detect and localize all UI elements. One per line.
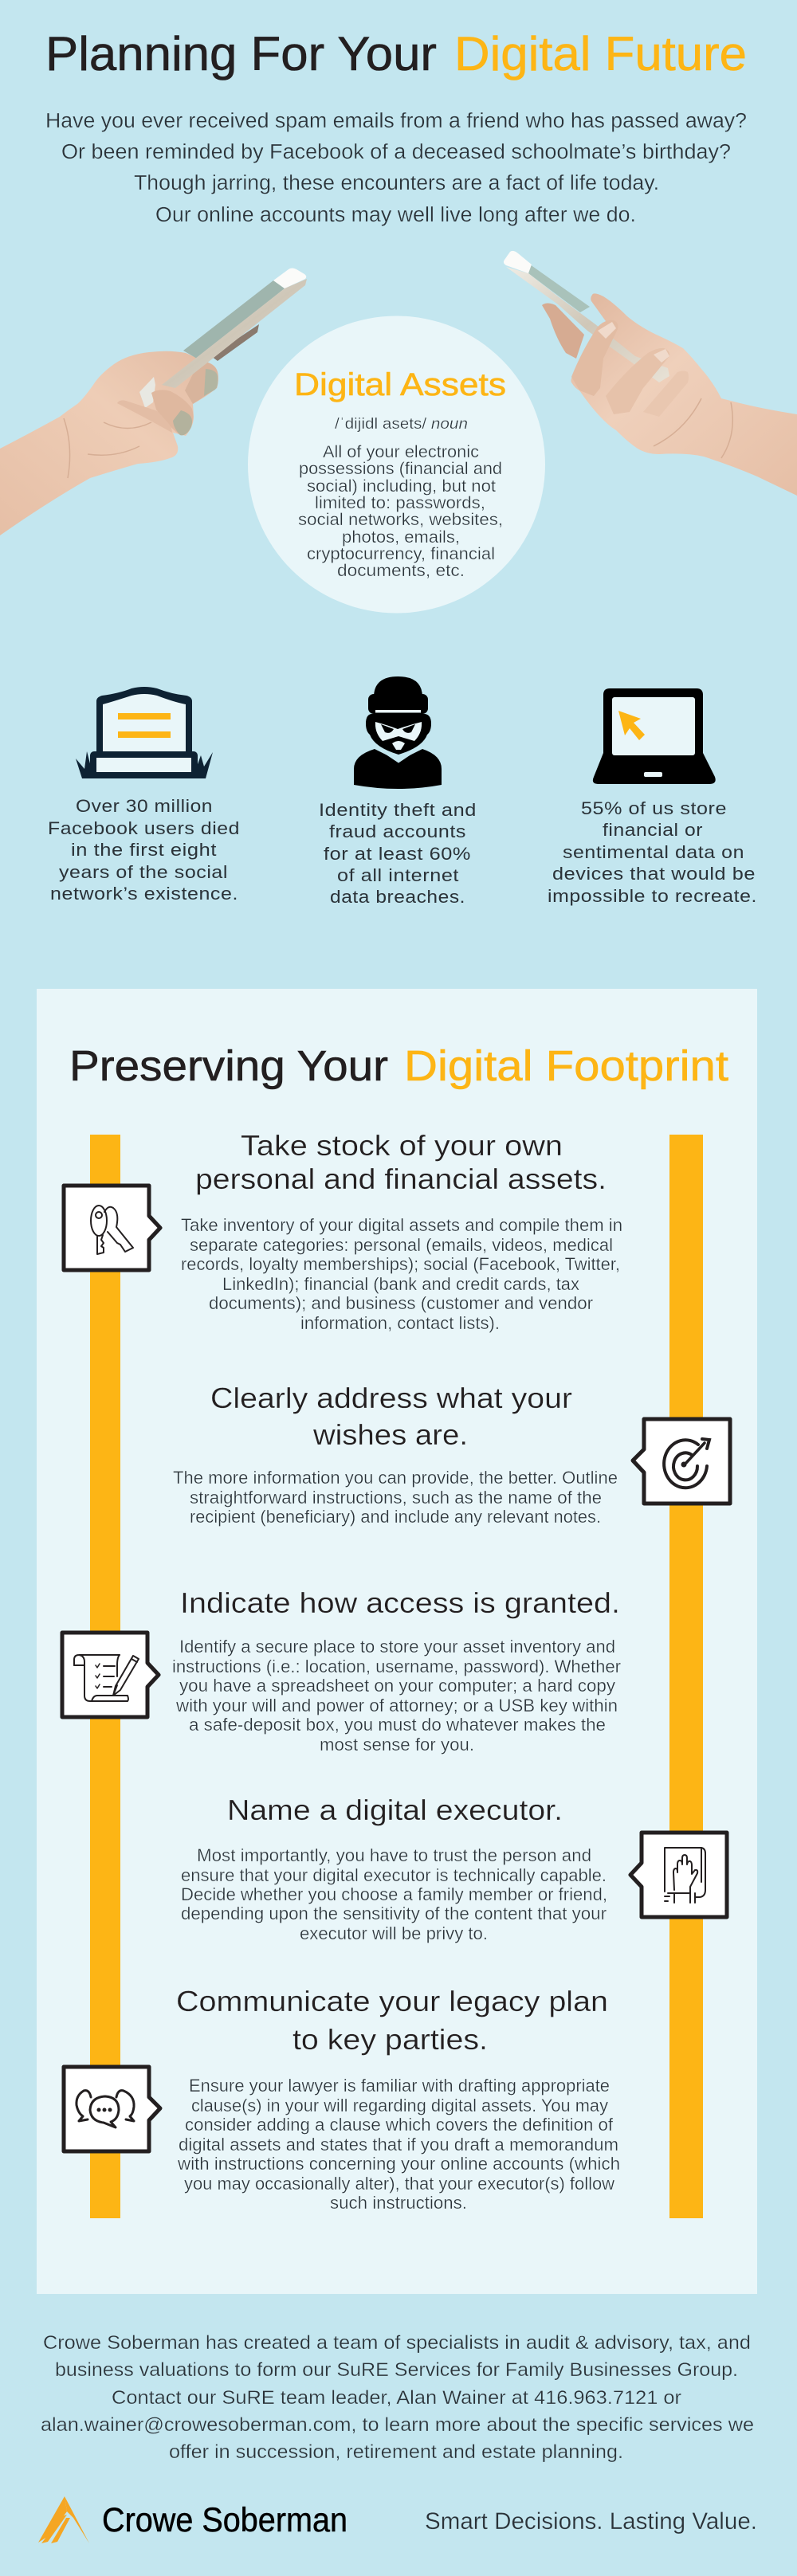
closing text: Crowe Soberman has created a team of specialists in audit & advisory, tax, and <box>43 2332 751 2354</box>
step heading <box>195 1129 607 1195</box>
step text: instructions (i.e.: location, username, password). Whether <box>172 1657 621 1676</box>
illustration: right hand holding phone <box>504 251 797 496</box>
heading: preserving your digital footprint: Preserving Your <box>69 1042 388 1090</box>
icon: laptop with cursor <box>593 688 716 784</box>
stat text: identity theft: for at least 60% <box>324 844 471 864</box>
intro text <box>45 110 747 226</box>
title: Planning For Your <box>45 27 437 80</box>
step text: Most importantly, you have to trust the person and <box>197 1845 591 1865</box>
left timeline bar <box>90 1135 120 2218</box>
definition text: social) including, but not <box>307 477 496 496</box>
definition text: social networks, websites, <box>298 511 503 529</box>
stat text: facebook users: Facebook users died <box>48 818 240 838</box>
definition text: All of your electronic <box>323 443 479 461</box>
step text: information, contact lists). <box>300 1313 500 1333</box>
icon box: target <box>633 1419 730 1504</box>
title: Digital Future <box>454 27 747 80</box>
definition text: possessions (financial and <box>299 460 502 478</box>
pronunciation: /ˈdijidl asets/ noun <box>335 416 468 433</box>
step text: Ensure your lawyer is familiar with drafting appropriate <box>189 2076 610 2096</box>
step text: most sense for you. <box>320 1735 474 1755</box>
heading: preserving your digital footprint: Digital Footprint <box>404 1042 728 1090</box>
step text: you may occasionally alter), that your executor(s) follow <box>184 2174 614 2194</box>
step text: LinkedIn); financial (bank and credit cards, tax <box>222 1274 579 1294</box>
definition text <box>298 443 503 580</box>
icon box: keys <box>64 1186 160 1270</box>
step text <box>177 2076 620 2213</box>
step text: consider adding a clause which covers the definition of <box>185 2115 614 2135</box>
tagline: Smart Decisions. Lasting Value. <box>425 2508 757 2535</box>
step text: Identify a secure place to store your asset inventory and <box>179 1637 615 1657</box>
icon: masked thief <box>354 676 442 789</box>
title <box>45 27 747 80</box>
closing text <box>41 2332 754 2463</box>
logo wordmark: Crowe Soberman <box>102 2501 347 2539</box>
right timeline bar <box>669 1135 703 2218</box>
step text: a safe-deposit box, you must do whatever makes the <box>189 1715 606 1735</box>
step text <box>173 1468 618 1527</box>
closing text: Contact our SuRE team leader, Alan Wainer at 416.963.7121 or <box>112 2387 681 2409</box>
step text: such instructions. <box>330 2193 467 2213</box>
step text <box>181 1215 622 1333</box>
step heading: to key parties. <box>292 2023 488 2056</box>
step text: recipient (beneficiary) and include any relevant notes. <box>190 1507 601 1527</box>
stat text: stored data: financial or <box>603 820 703 840</box>
step heading: wishes are. <box>312 1418 468 1451</box>
stat text: facebook users: in the first eight <box>71 840 217 860</box>
step text: with your will and power of attorney; or a USB key within <box>175 1696 618 1715</box>
stat text: facebook users <box>48 796 240 904</box>
logo: crowe soberman <box>38 2496 347 2543</box>
step text: executor will be privy to. <box>300 1923 488 1943</box>
step 4 <box>181 1794 727 1943</box>
step text: ensure that your digital executor is technically capable. <box>181 1865 607 1885</box>
stat text: identity theft: data breaches. <box>330 887 465 907</box>
stat text: stored data: impossible to recreate. <box>548 886 757 906</box>
step text: clause(s) in your will regarding digital assets. You may <box>191 2096 608 2115</box>
stat text: stored data: devices that would be <box>552 864 756 884</box>
stat text: identity theft: fraud accounts <box>329 821 466 841</box>
definition text: cryptocurrency, financial <box>307 545 495 563</box>
step 3 <box>62 1586 621 1755</box>
icon box: speech bubbles <box>64 2067 160 2151</box>
step text: with instructions concerning your online accounts (which <box>177 2154 620 2174</box>
definition text: documents, etc. <box>337 562 465 580</box>
step 5 <box>64 1985 620 2213</box>
stat text: identity theft: Identity theft and <box>319 800 477 820</box>
intro text: Have you ever received spam emails from a friend who has passed away? <box>45 110 747 132</box>
step text: documents); and business (customer and vendor <box>209 1293 593 1313</box>
heading: preserving your digital footprint <box>69 1042 728 1090</box>
step text: straightforward instructions, such as the name of the <box>190 1488 602 1508</box>
icon: tombstone <box>76 687 213 778</box>
stat text: stored data: 55% of us store <box>581 798 727 818</box>
step text: Decide whether you choose a family member or friend, <box>181 1884 607 1904</box>
icon box: scroll and pen <box>62 1633 159 1717</box>
heading: digital assets: Digital Assets <box>294 367 506 402</box>
step heading: personal and financial assets. <box>195 1163 607 1195</box>
logo mark <box>38 2496 89 2543</box>
definition text: limited to: passwords, <box>315 494 485 512</box>
panel: digital assets circle <box>248 316 545 614</box>
step text: Take inventory of your digital assets and compile them in <box>181 1215 622 1235</box>
step text: digital assets and states that if you draft a memorandum <box>179 2135 618 2155</box>
panel: preserving your digital footprint <box>37 989 757 2294</box>
illustration: left hand holding phone <box>0 268 307 535</box>
stat text: facebook users: Over 30 million <box>76 796 213 816</box>
step text: you have a spreadsheet on your computer; a hard copy <box>179 1676 615 1696</box>
step text: separate categories: personal (emails, videos, medical <box>190 1235 613 1255</box>
step text: records, loyalty memberships); social (Facebook, Twitter, <box>181 1254 620 1274</box>
step text <box>181 1845 607 1943</box>
definition text: photos, emails, <box>342 528 460 547</box>
step heading: Take stock of your own <box>241 1129 563 1162</box>
stat text: facebook users: network’s existence. <box>50 884 238 904</box>
step heading <box>210 1382 572 1451</box>
step 1 <box>64 1129 622 1333</box>
step text <box>172 1637 621 1755</box>
step heading: Communicate your legacy plan <box>176 1985 608 2017</box>
step 2 <box>173 1382 730 1527</box>
closing text: alan.wainer@crowesoberman.com, to learn more about the specific services we <box>41 2414 754 2436</box>
stat text: stored data: sentimental data on <box>563 842 744 862</box>
stat text: facebook users: years of the social <box>59 862 228 882</box>
step heading: Name a digital executor. <box>227 1794 563 1826</box>
stat text: identity theft <box>319 800 477 907</box>
step text: depending upon the sensitivity of the content that your <box>181 1904 607 1923</box>
step heading: Clearly address what your <box>210 1382 572 1414</box>
intro text: Or been reminded by Facebook of a deceased schoolmate’s birthday? <box>61 141 731 163</box>
closing text: business valuations to form our SuRE Services for Family Businesses Group. <box>55 2359 738 2381</box>
closing text: offer in succession, retirement and estate planning. <box>169 2441 623 2463</box>
stat text: identity theft: of all internet <box>337 865 459 885</box>
intro text: Our online accounts may well live long after we do. <box>155 204 636 226</box>
step heading: Indicate how access is granted. <box>180 1586 620 1619</box>
intro text: Though jarring, these encounters are a fact of life today. <box>134 172 659 194</box>
stat text: stored data <box>548 798 757 906</box>
step text: The more information you can provide, the better. Outline <box>173 1468 618 1488</box>
icon box: hand on book <box>630 1833 727 1917</box>
step heading <box>176 1985 608 2056</box>
